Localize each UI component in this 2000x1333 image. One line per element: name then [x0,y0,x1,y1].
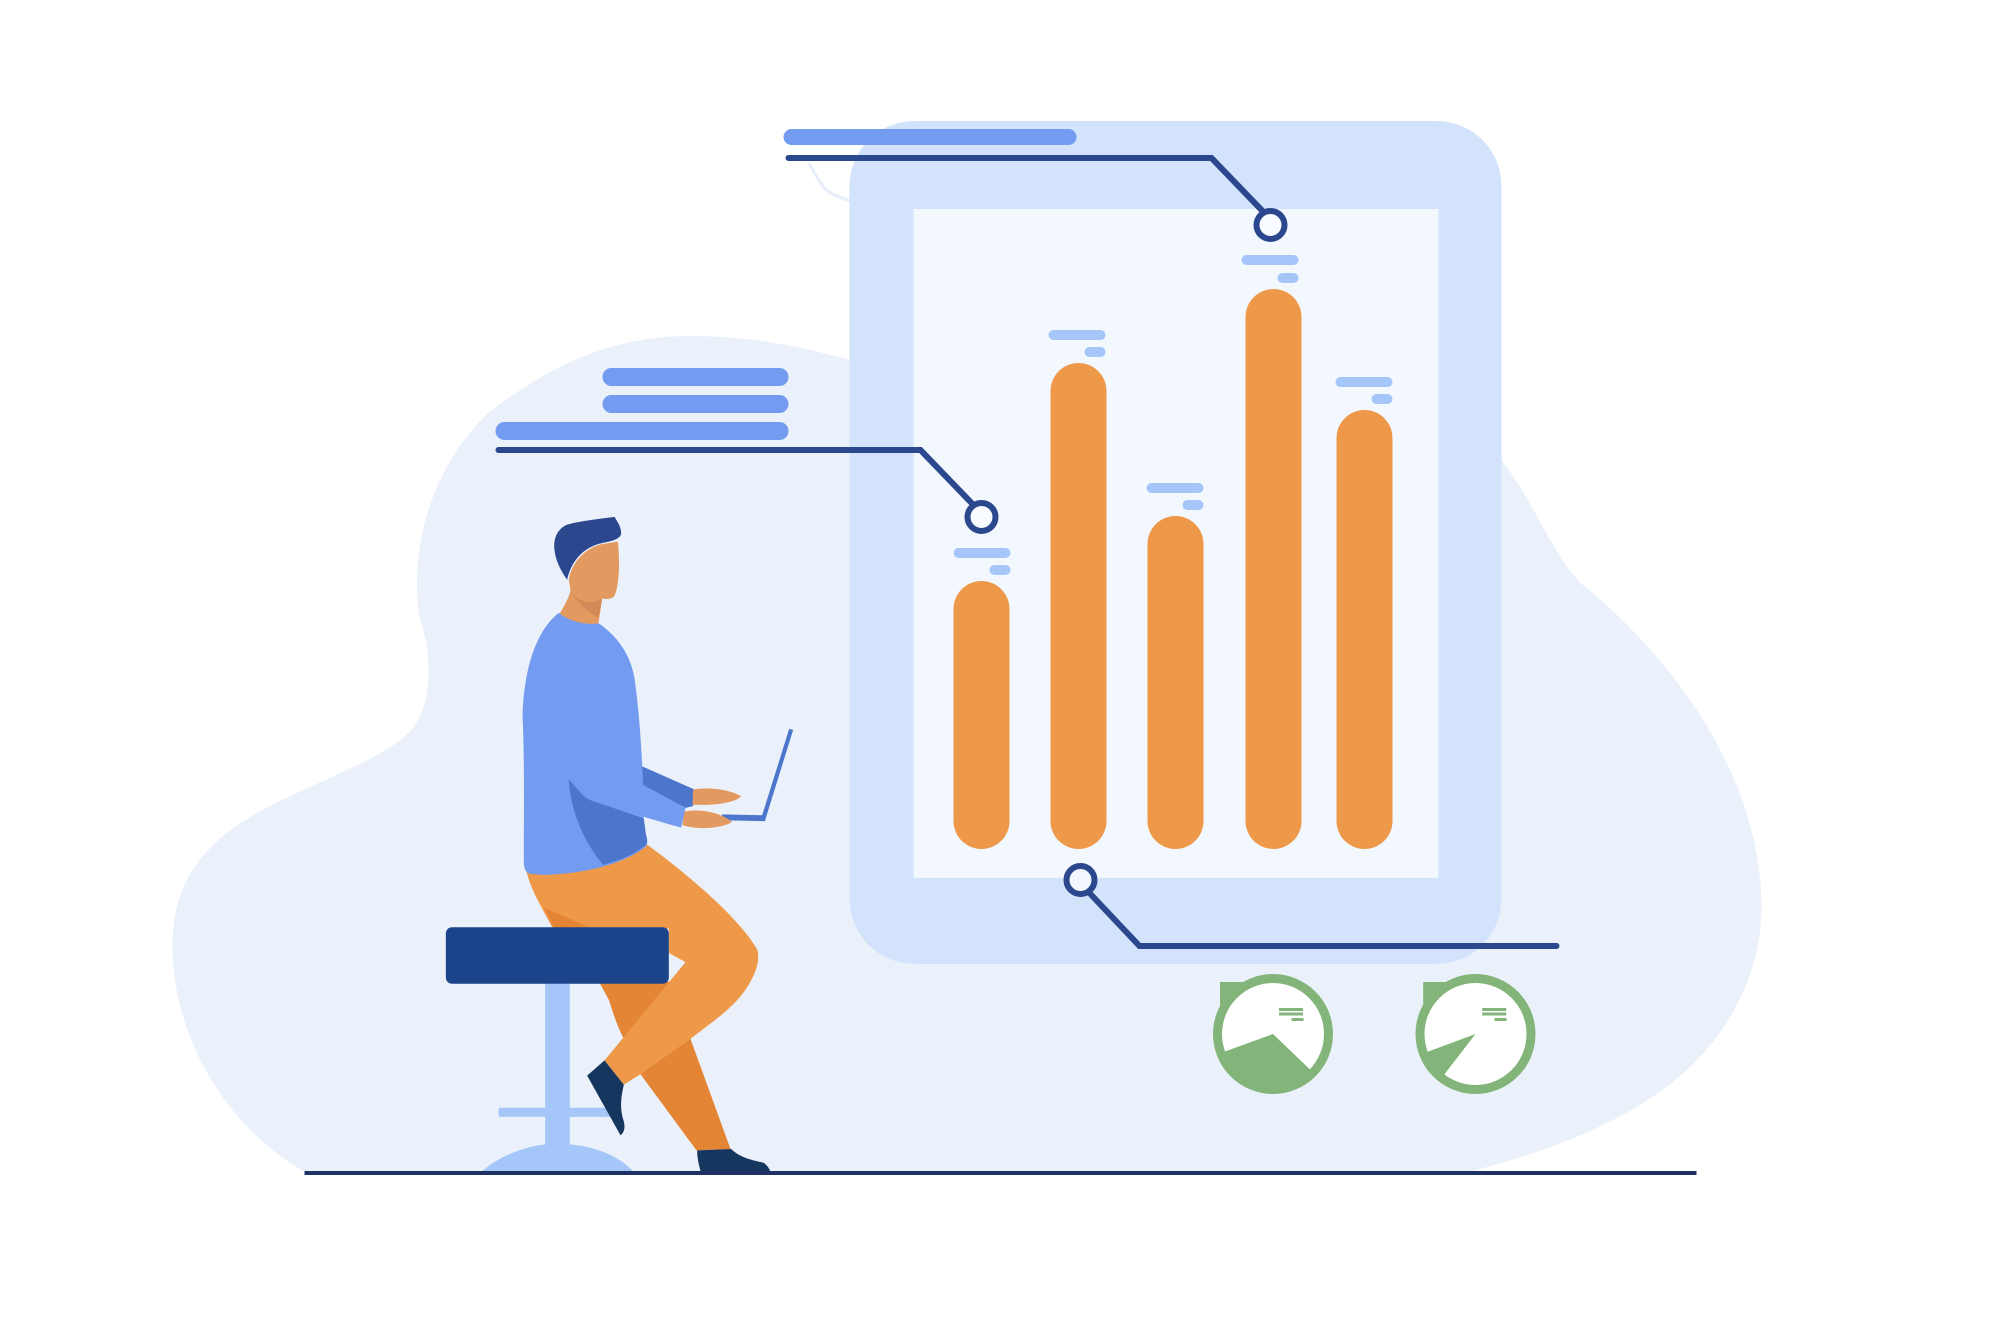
bar 3 [1146,483,1204,849]
tablet frame [850,121,1502,964]
hair [554,517,621,580]
stool seat [446,927,669,984]
pie chart 1 [1213,974,1333,1094]
pie chart 2 [1416,974,1536,1094]
sweater [522,613,647,875]
bar 1 [954,548,1010,849]
ground line [304,1171,1696,1175]
bar chart [954,255,1392,849]
bar 2 [1048,330,1106,849]
head and neck [554,542,619,633]
front shoe [587,1060,624,1135]
near sleeve [590,775,685,828]
far hand [692,788,741,805]
bar 4 [1242,255,1302,849]
bar 5 [1336,377,1392,849]
back shoe [697,1149,770,1173]
far arm [640,766,694,808]
sweater shadow [569,779,647,865]
front leg [526,845,758,1085]
laptop [722,729,793,821]
back leg [599,981,730,1150]
callout: top [784,129,1284,239]
background blob [172,336,1762,1173]
callout: left [496,368,996,531]
stool leg and base [481,981,634,1172]
near hand [682,811,732,828]
chart screen panel [914,209,1438,878]
stool and seated person [446,517,793,1173]
callout: bottom [1066,866,1556,946]
